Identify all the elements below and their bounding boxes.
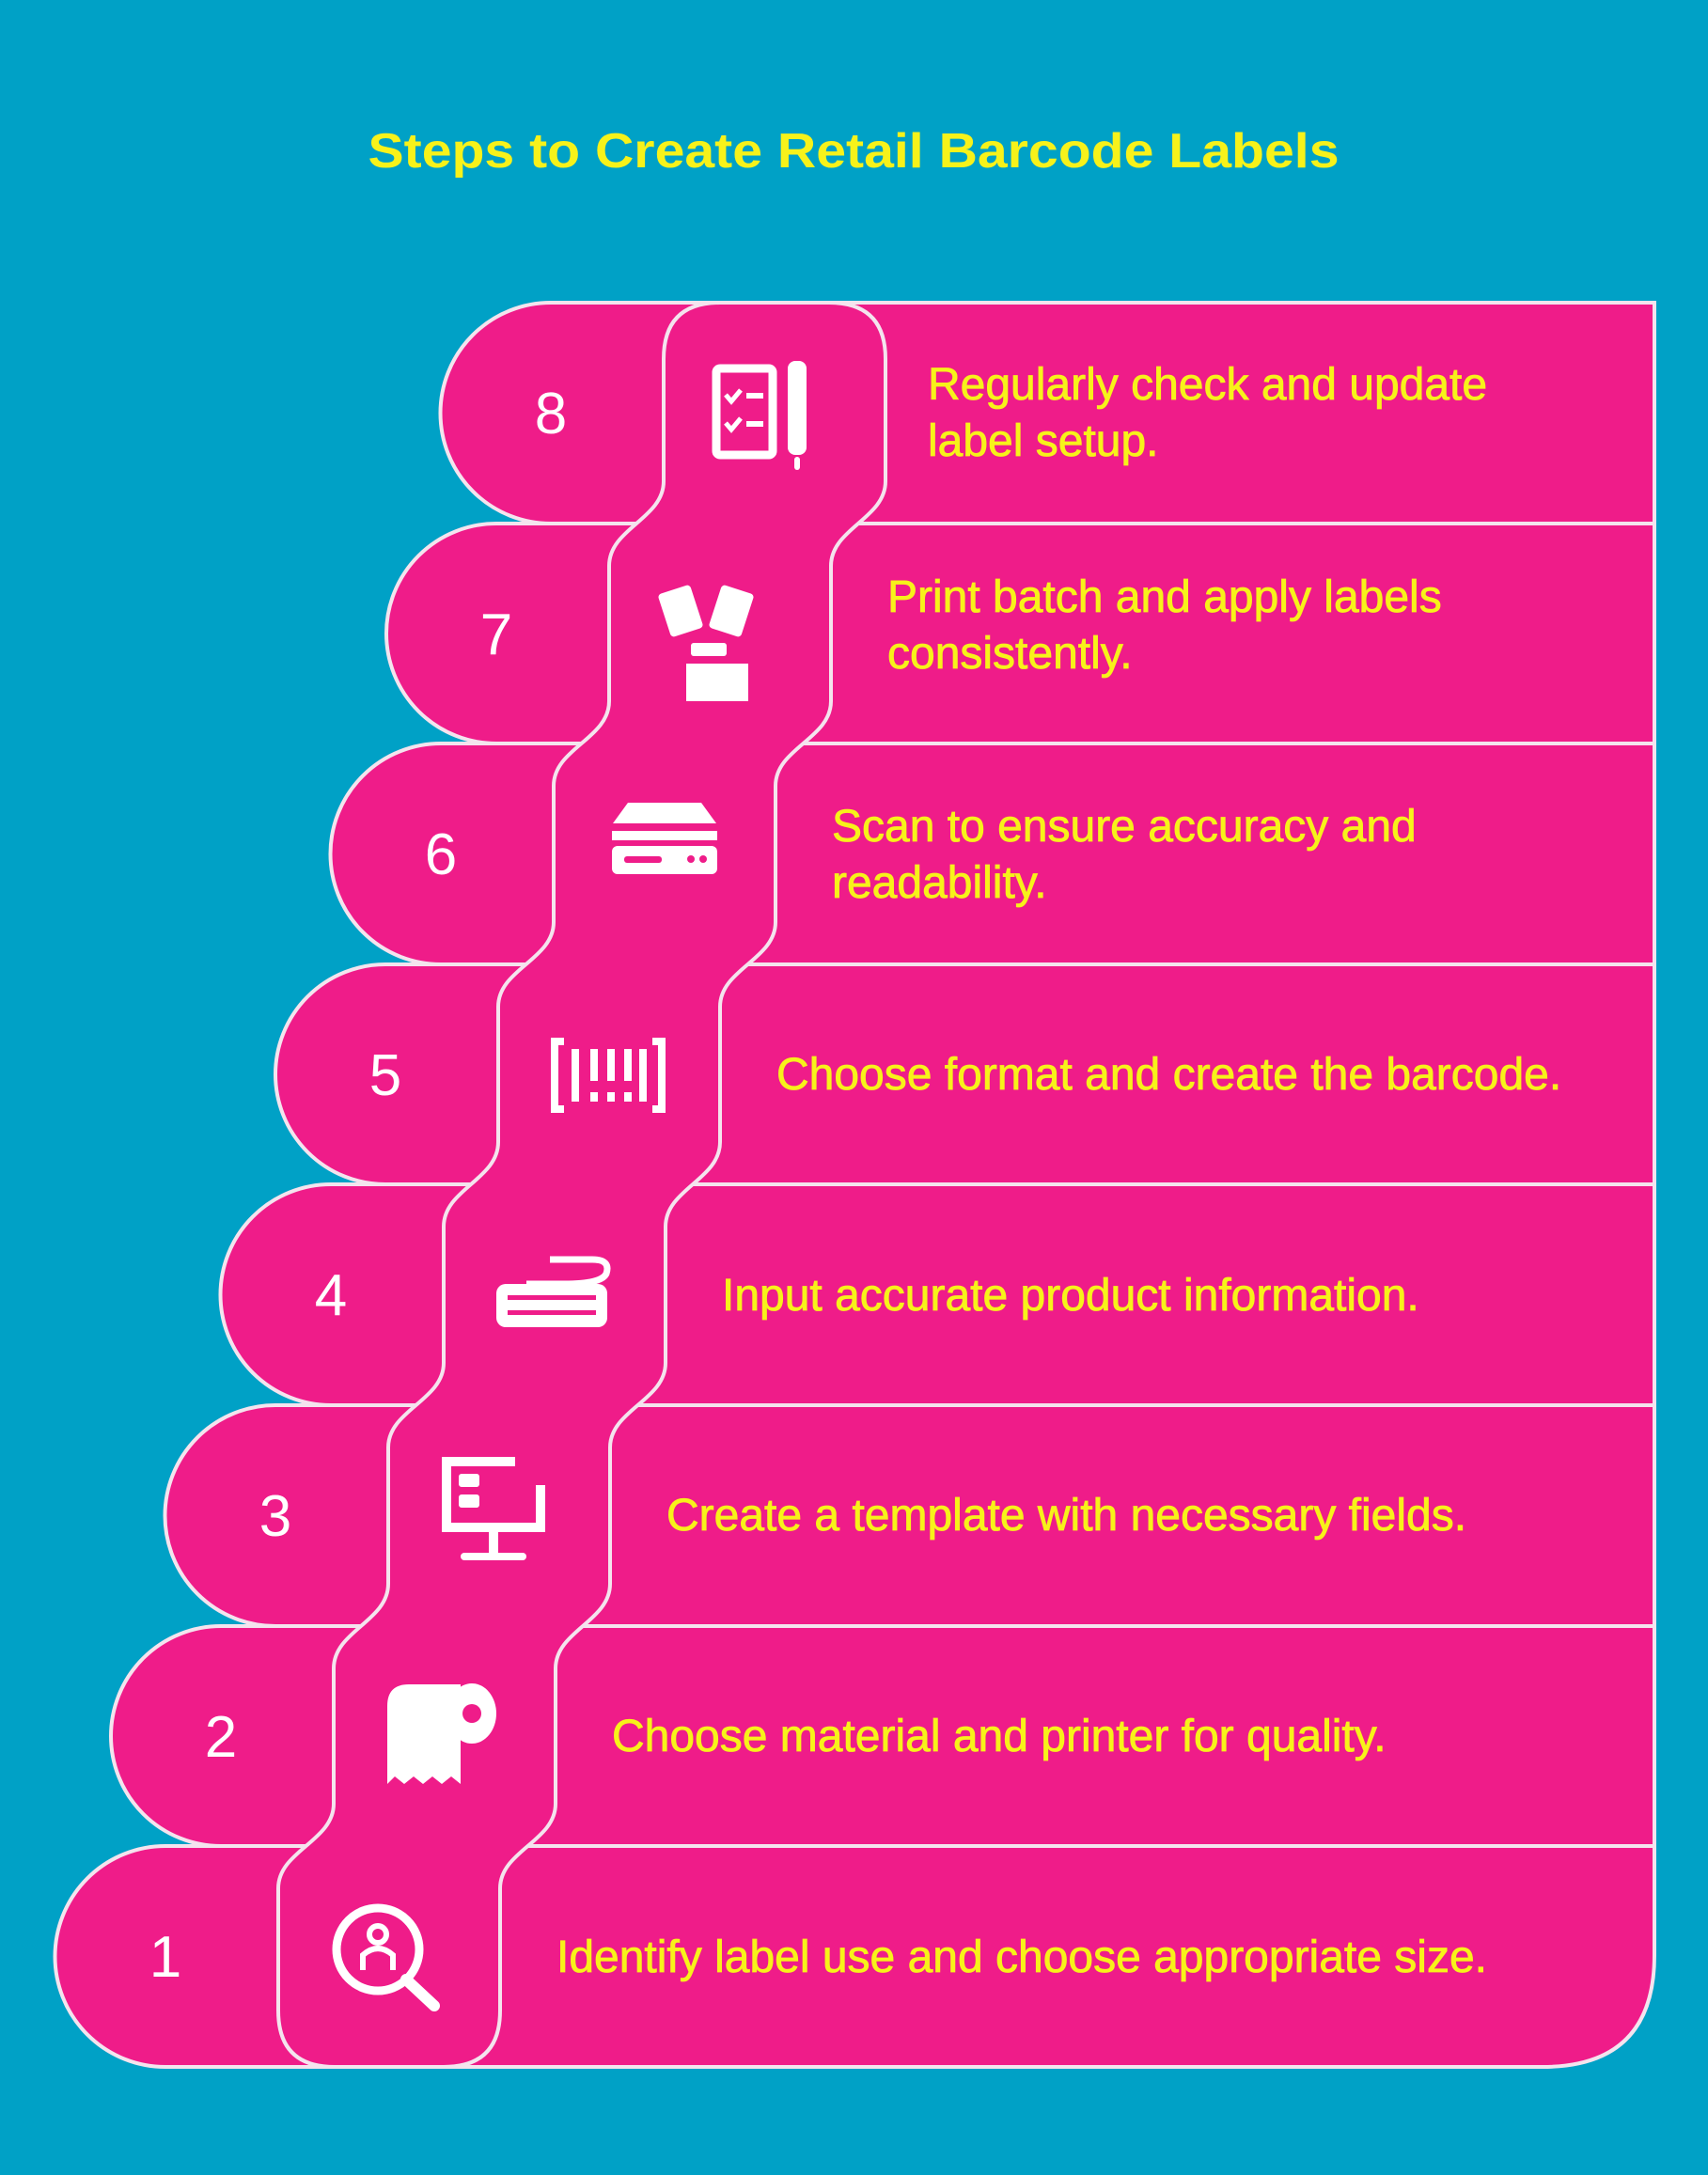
step texts: Print batch and apply labels [887,572,1442,622]
step texts: Choose material and printer for quality. [612,1712,1387,1761]
icon band [278,303,885,2067]
row 2 [111,1626,1654,1846]
step texts: Input accurate product information. [722,1271,1419,1321]
icon: search person [337,1908,434,2006]
numbers: 4 [315,1263,347,1328]
numbers: 6 [425,822,457,887]
icon: keyboard [496,1260,607,1327]
step texts: label setup. [928,416,1159,466]
step texts: Identify label use and choose appropriate size. [556,1932,1487,1982]
icon: paper roll [387,1683,496,1784]
icon: scanner [612,803,717,874]
step texts: readability. [832,858,1047,908]
numbers: 5 [369,1043,401,1108]
step texts [556,360,1561,1982]
icon: checklist with pen [716,361,807,470]
step texts: consistently. [887,629,1133,679]
row 3 [165,1405,1654,1626]
row 5 [275,964,1654,1184]
numbers: 1 [149,1925,181,1990]
step texts: Create a template with necessary fields. [666,1491,1466,1541]
icon: barcode [555,1041,662,1109]
numbers: 2 [205,1705,237,1770]
steps diagram [55,303,1654,2067]
step texts: Scan to ensure accuracy and [832,802,1417,852]
row 7 [386,524,1654,743]
numbers: 3 [259,1484,291,1549]
step texts: Regularly check and update [928,360,1487,410]
icon: computer [442,1457,545,1560]
row 8 [440,303,1654,524]
numbers: 7 [480,602,512,667]
numbers [149,382,567,1990]
numbers: 8 [535,382,567,446]
row 4 [220,1184,1654,1405]
row 1 [55,1846,1654,2067]
row 6 [330,743,1654,964]
icon: voting box [657,585,755,701]
step texts: Choose format and create the barcode. [776,1050,1561,1100]
title: Steps to Create Retail Barcode Labels [368,124,1339,179]
